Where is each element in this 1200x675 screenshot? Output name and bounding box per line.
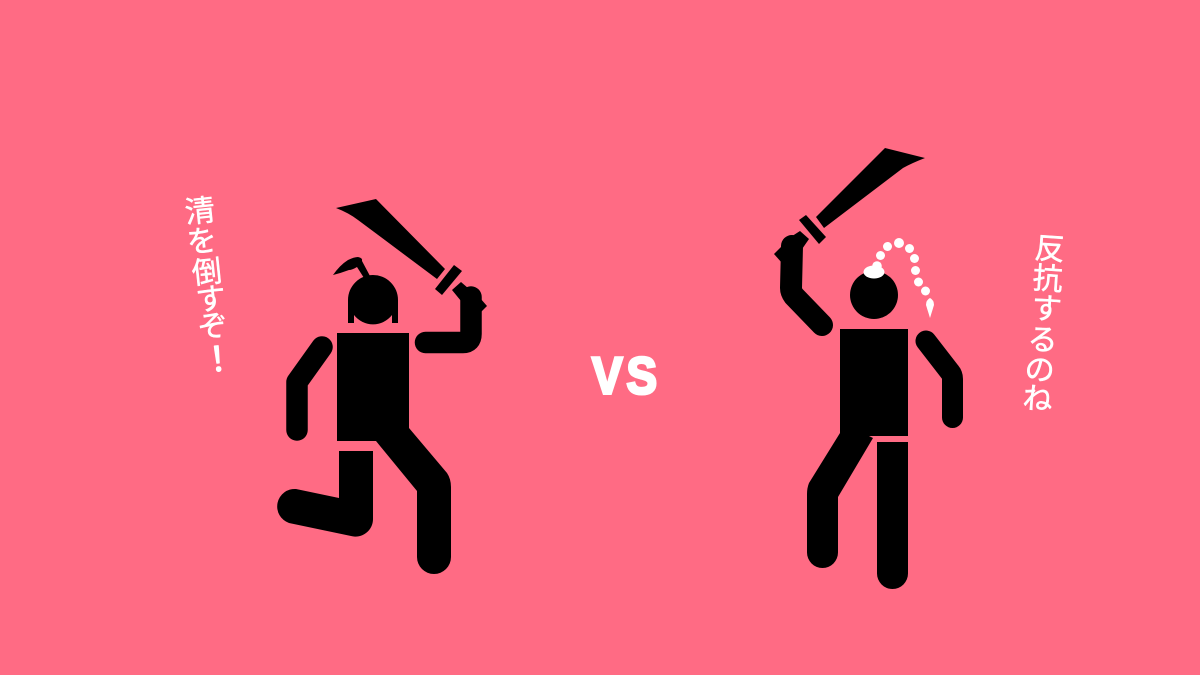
left figure lower arm (297, 347, 322, 430)
icon: left figure sword (336, 199, 487, 313)
left figure body (337, 333, 409, 441)
left figure straight leg (376, 428, 451, 574)
right figure head (850, 271, 898, 319)
right figure straight leg (877, 442, 908, 589)
right figure: warrior with sword and braid (774, 148, 952, 589)
icon: right figure sword (774, 148, 925, 263)
right figure lower arm (926, 341, 952, 418)
icon: left figure topknot (333, 257, 370, 278)
icon: left figure head and hair (348, 275, 398, 324)
VS label: VS (592, 348, 657, 405)
right figure raised arm (791, 246, 822, 325)
left speech text: 清を倒すぞ (183, 194, 230, 345)
left speech text: ！ (199, 340, 237, 381)
right figure bent leg (807, 425, 873, 568)
icon: right figure white bun and braid (864, 238, 934, 318)
left figure raised arm (426, 297, 471, 342)
right speech text: 反抗するのね (1022, 232, 1066, 417)
left figure: samurai with sword (277, 199, 487, 574)
right figure body (840, 329, 908, 436)
left figure bent leg (277, 451, 373, 537)
